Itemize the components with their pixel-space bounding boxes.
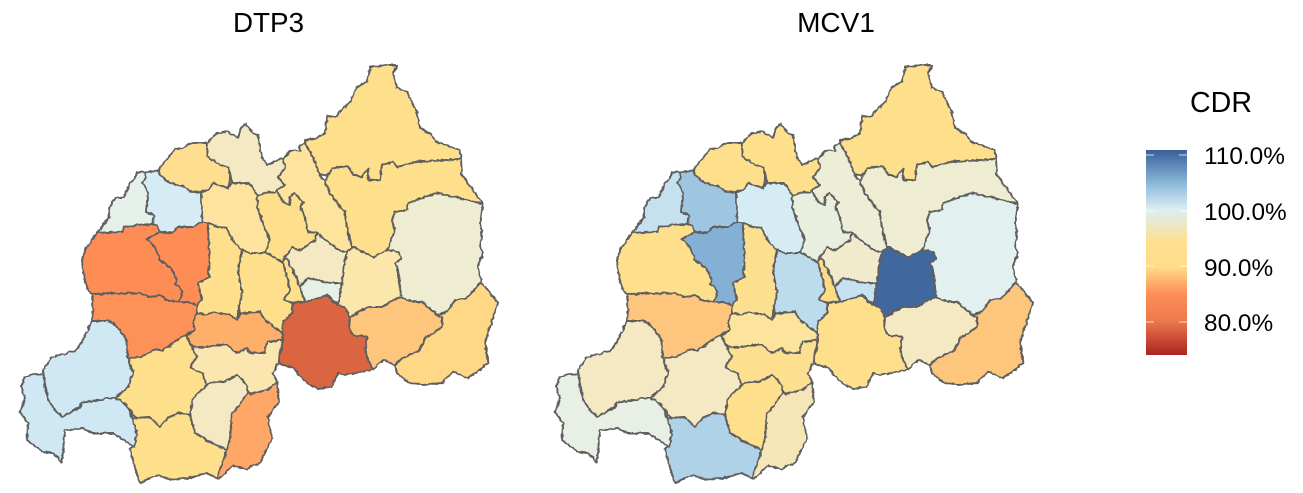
legend labels — [1204, 143, 1287, 337]
legend title: CDR — [1190, 87, 1252, 119]
title: MCV1: MCV1 — [797, 7, 875, 38]
legend labels: 80.0% — [1204, 310, 1273, 337]
legend ticks — [1146, 155, 1187, 322]
title: DTP3: DTP3 — [233, 7, 304, 38]
legend labels: 110.0% — [1204, 143, 1285, 170]
legend labels: 100.0% — [1204, 199, 1287, 226]
colour bar — [1146, 150, 1187, 355]
legend: CDR colour bar — [1146, 87, 1287, 355]
map: DTP3 district choropleth — [20, 65, 498, 483]
map: MCV1 district choropleth — [555, 65, 1033, 483]
legend labels: 90.0% — [1204, 255, 1273, 282]
